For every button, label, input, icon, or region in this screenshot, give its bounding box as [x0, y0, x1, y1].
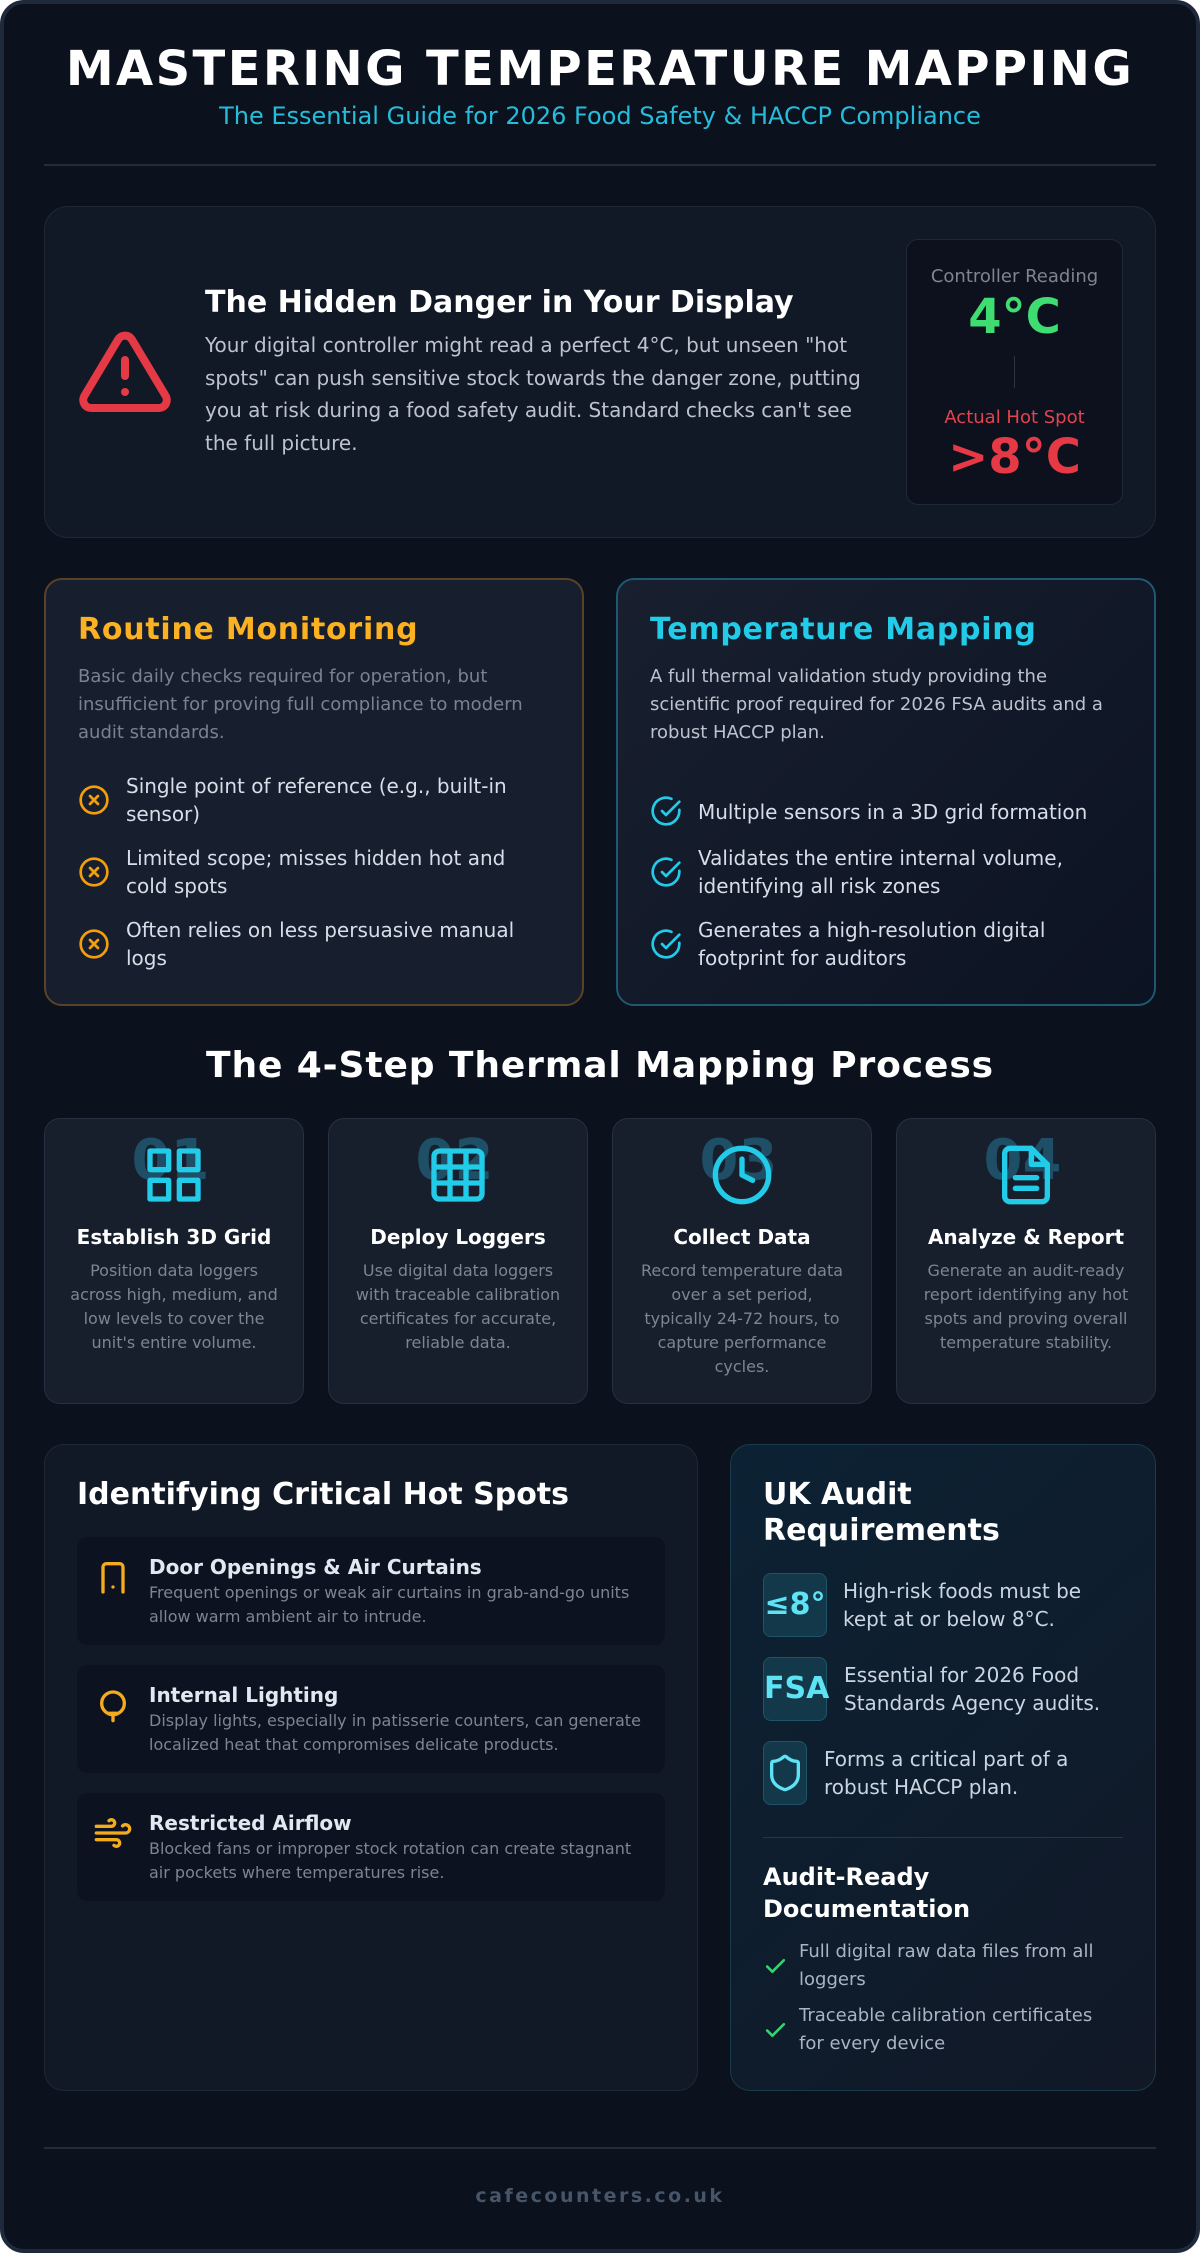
- hero heading: The Hidden Danger in Your Display: [205, 285, 794, 320]
- mapping description: [650, 666, 1103, 743]
- mapping description: robust HACCP plan.: [650, 722, 825, 743]
- routine description: Basic daily checks required for operation, but: [78, 666, 487, 687]
- mapping heading: Temperature Mapping: [650, 612, 1037, 647]
- icon: check: [763, 1954, 788, 1979]
- item text: Limited scope; misses hidden hot and: [126, 846, 505, 870]
- hot spot value: >8°C: [948, 429, 1081, 485]
- documentation heading: Documentation: [763, 1895, 970, 1923]
- item description: localized heat that compromises delicate products.: [149, 1735, 559, 1754]
- item text: for every device: [799, 2033, 945, 2054]
- icon: clock: [712, 1146, 772, 1204]
- mapping description: A full thermal validation study providing the: [650, 666, 1047, 687]
- step description: [924, 1261, 1128, 1352]
- item description: air pockets where temperatures rise.: [149, 1863, 444, 1882]
- item description: allow warm ambient air to intrude.: [149, 1607, 427, 1626]
- icon: shield: [765, 1753, 805, 1793]
- item description: [149, 1711, 641, 1754]
- step description: over a set period,: [671, 1285, 813, 1304]
- item text: Validates the entire internal volume,: [698, 846, 1063, 870]
- icon: warning triangle: [79, 332, 171, 412]
- controller label: Controller Reading: [931, 266, 1098, 287]
- hot spot item: airflow: [77, 1793, 665, 1901]
- routine description: audit standards.: [78, 722, 225, 743]
- documentation heading: [763, 1861, 970, 1925]
- step description: [641, 1261, 843, 1376]
- hero paragraph: you at risk during a food safety audit. Standard checks can't see: [205, 398, 852, 422]
- step card 3: [612, 1118, 872, 1404]
- item description: [149, 1583, 629, 1626]
- icon: grid: [147, 1148, 201, 1202]
- panel: temperature mapping: [616, 578, 1156, 1006]
- step description: spots and proving overall: [924, 1309, 1128, 1328]
- subtitle: The Essential Guide for 2026 Food Safety & HACCP Compliance: [219, 102, 981, 130]
- step card 1: [44, 1118, 304, 1404]
- item text: Multiple sensors in a 3D grid formation: [698, 800, 1087, 824]
- step description: across high, medium, and: [70, 1285, 278, 1304]
- icon: x circle: [79, 785, 109, 815]
- item title: Internal Lighting: [149, 1683, 338, 1707]
- gauge divider: [1014, 356, 1015, 388]
- requirement text: robust HACCP plan.: [824, 1775, 1018, 1799]
- footer divider: [44, 2147, 1156, 2149]
- panel: hidden danger: [44, 206, 1156, 538]
- step title: Establish 3D Grid: [77, 1225, 271, 1249]
- item text: [799, 2002, 1092, 2058]
- item text: [126, 918, 514, 970]
- section divider: [763, 1837, 1123, 1838]
- badge text: ≤8°: [764, 1587, 826, 1622]
- routine description: insufficient for proving full compliance to modern: [78, 694, 523, 715]
- badge: [763, 1573, 827, 1637]
- item text: Often relies on less persuasive manual: [126, 918, 514, 942]
- documentation heading: Audit-Ready: [763, 1863, 929, 1891]
- badge: [763, 1741, 807, 1805]
- routine description: [78, 666, 523, 743]
- step title: Deploy Loggers: [370, 1225, 546, 1249]
- item description: Frequent openings or weak air curtains in grab-and-go units: [149, 1583, 629, 1602]
- documentation item 2: [763, 2002, 1123, 2058]
- requirement text: kept at or below 8°C.: [843, 1607, 1055, 1631]
- panel heading: [763, 1477, 1000, 1548]
- badge: [763, 1657, 827, 1721]
- step title: Analyze & Report: [928, 1225, 1124, 1249]
- step title: Collect Data: [673, 1225, 811, 1249]
- step description: cycles.: [715, 1357, 769, 1376]
- item text: [698, 846, 1063, 898]
- item text: Generates a high-resolution digital: [698, 918, 1045, 942]
- item description: Blocked fans or improper stock rotation can create stagnant: [149, 1839, 631, 1858]
- step number: 04: [984, 1128, 1061, 1193]
- step number: 03: [700, 1128, 777, 1193]
- header: [44, 41, 1156, 166]
- requirement text: Standards Agency audits.: [844, 1691, 1100, 1715]
- step description: temperature stability.: [940, 1333, 1112, 1352]
- step description: report identifying any hot: [924, 1285, 1128, 1304]
- requirement 1: [763, 1573, 1081, 1637]
- item text: [698, 918, 1045, 970]
- requirement 2: [763, 1657, 1100, 1721]
- item text: Single point of reference (e.g., built-in: [126, 774, 507, 798]
- icon: lightbulb: [100, 1690, 126, 1722]
- hero paragraph: [205, 333, 861, 455]
- step description: capture performance: [658, 1333, 826, 1352]
- item text: Traceable calibration certificates: [799, 2005, 1092, 2026]
- footer text: cafecounters.co.uk: [475, 2185, 725, 2207]
- step description: [356, 1261, 560, 1352]
- step description: low levels to cover the: [84, 1309, 264, 1328]
- item text: loggers: [799, 1969, 866, 1990]
- icon: check circle: [651, 929, 681, 959]
- icon: door: [101, 1562, 125, 1594]
- requirement text: [843, 1579, 1081, 1631]
- item description: Display lights, especially in patisserie counters, can generate: [149, 1711, 641, 1730]
- requirement text: High-risk foods must be: [843, 1579, 1081, 1603]
- icon: check: [763, 2018, 788, 2043]
- panel: UK audit requirements: [730, 1444, 1156, 2091]
- icon: check circle: [651, 796, 681, 826]
- hero paragraph: spots" can push sensitive stock towards the danger zone, putting: [205, 366, 861, 390]
- item text: identifying all risk zones: [698, 874, 940, 898]
- item text: logs: [126, 946, 167, 970]
- hero paragraph: the full picture.: [205, 431, 358, 455]
- step number: 02: [416, 1128, 493, 1193]
- list item 3: [651, 918, 1045, 970]
- requirement text: Forms a critical part of a: [824, 1747, 1068, 1771]
- panel: routine monitoring: [44, 578, 584, 1006]
- step description: Use digital data loggers: [363, 1261, 553, 1280]
- step description: Generate an audit-ready: [928, 1261, 1124, 1280]
- list item 3: [79, 918, 514, 970]
- icon: x circle: [79, 929, 109, 959]
- item text: cold spots: [126, 874, 227, 898]
- routine heading: Routine Monitoring: [78, 612, 418, 647]
- item text: [799, 1938, 1093, 1994]
- list item 2: [79, 846, 505, 898]
- icon: x circle: [79, 857, 109, 887]
- step description: Record temperature data: [641, 1261, 843, 1280]
- section heading: process: The 4-Step Thermal Mapping Process: [206, 1045, 994, 1086]
- panel heading: Requirements: [763, 1513, 1000, 1548]
- step card 4: [896, 1118, 1156, 1404]
- step card 2: [328, 1118, 588, 1404]
- step description: Position data loggers: [90, 1261, 258, 1280]
- item text: sensor): [126, 802, 200, 826]
- step description: [70, 1261, 278, 1352]
- step description: unit's entire volume.: [91, 1333, 257, 1352]
- item text: [126, 846, 505, 898]
- hot spot item: lighting: [77, 1665, 665, 1773]
- icon: document: [1002, 1146, 1050, 1204]
- item title: Door Openings & Air Curtains: [149, 1555, 482, 1579]
- hot spot item: door: [77, 1537, 665, 1645]
- item text: [126, 774, 507, 826]
- hero paragraph: Your digital controller might read a perfect 4°C, but unseen "hot: [205, 333, 847, 357]
- panel heading: UK Audit: [763, 1477, 912, 1512]
- hot spot label: Actual Hot Spot: [944, 407, 1085, 428]
- requirement text: [844, 1661, 1100, 1717]
- panel heading: Identifying Critical Hot Spots: [77, 1477, 569, 1512]
- item text: Full digital raw data files from all: [799, 1941, 1093, 1962]
- icon: check circle: [651, 857, 681, 887]
- list item 1: [79, 774, 507, 826]
- step number: 01: [132, 1128, 209, 1193]
- list item 2: [651, 846, 1063, 898]
- gauge: controller vs hot spot: [906, 239, 1123, 505]
- requirement 3: [763, 1741, 1123, 1805]
- step description: certificates for accurate,: [360, 1309, 556, 1328]
- documentation item 1: [763, 1938, 1123, 1994]
- title: MASTERING TEMPERATURE MAPPING: [66, 41, 1134, 97]
- requirement text: [824, 1745, 1068, 1801]
- list item 1: [651, 796, 1087, 826]
- step description: typically 24-72 hours, to: [644, 1309, 840, 1328]
- step description: reliable data.: [405, 1333, 511, 1352]
- mapping description: scientific proof required for 2026 FSA audits and a: [650, 694, 1103, 715]
- controller value: 4°C: [968, 289, 1061, 345]
- badge text: FSA: [764, 1671, 829, 1706]
- panel: critical hot spots: [44, 1444, 698, 2091]
- item text: footprint for auditors: [698, 946, 906, 970]
- icon: table grid: [431, 1148, 485, 1202]
- item title: Restricted Airflow: [149, 1811, 352, 1835]
- header divider: [44, 164, 1156, 166]
- requirement text: Essential for 2026 Food: [844, 1663, 1079, 1687]
- icon: wind: [94, 1818, 132, 1848]
- item description: [149, 1839, 631, 1882]
- step description: with traceable calibration: [356, 1285, 560, 1304]
